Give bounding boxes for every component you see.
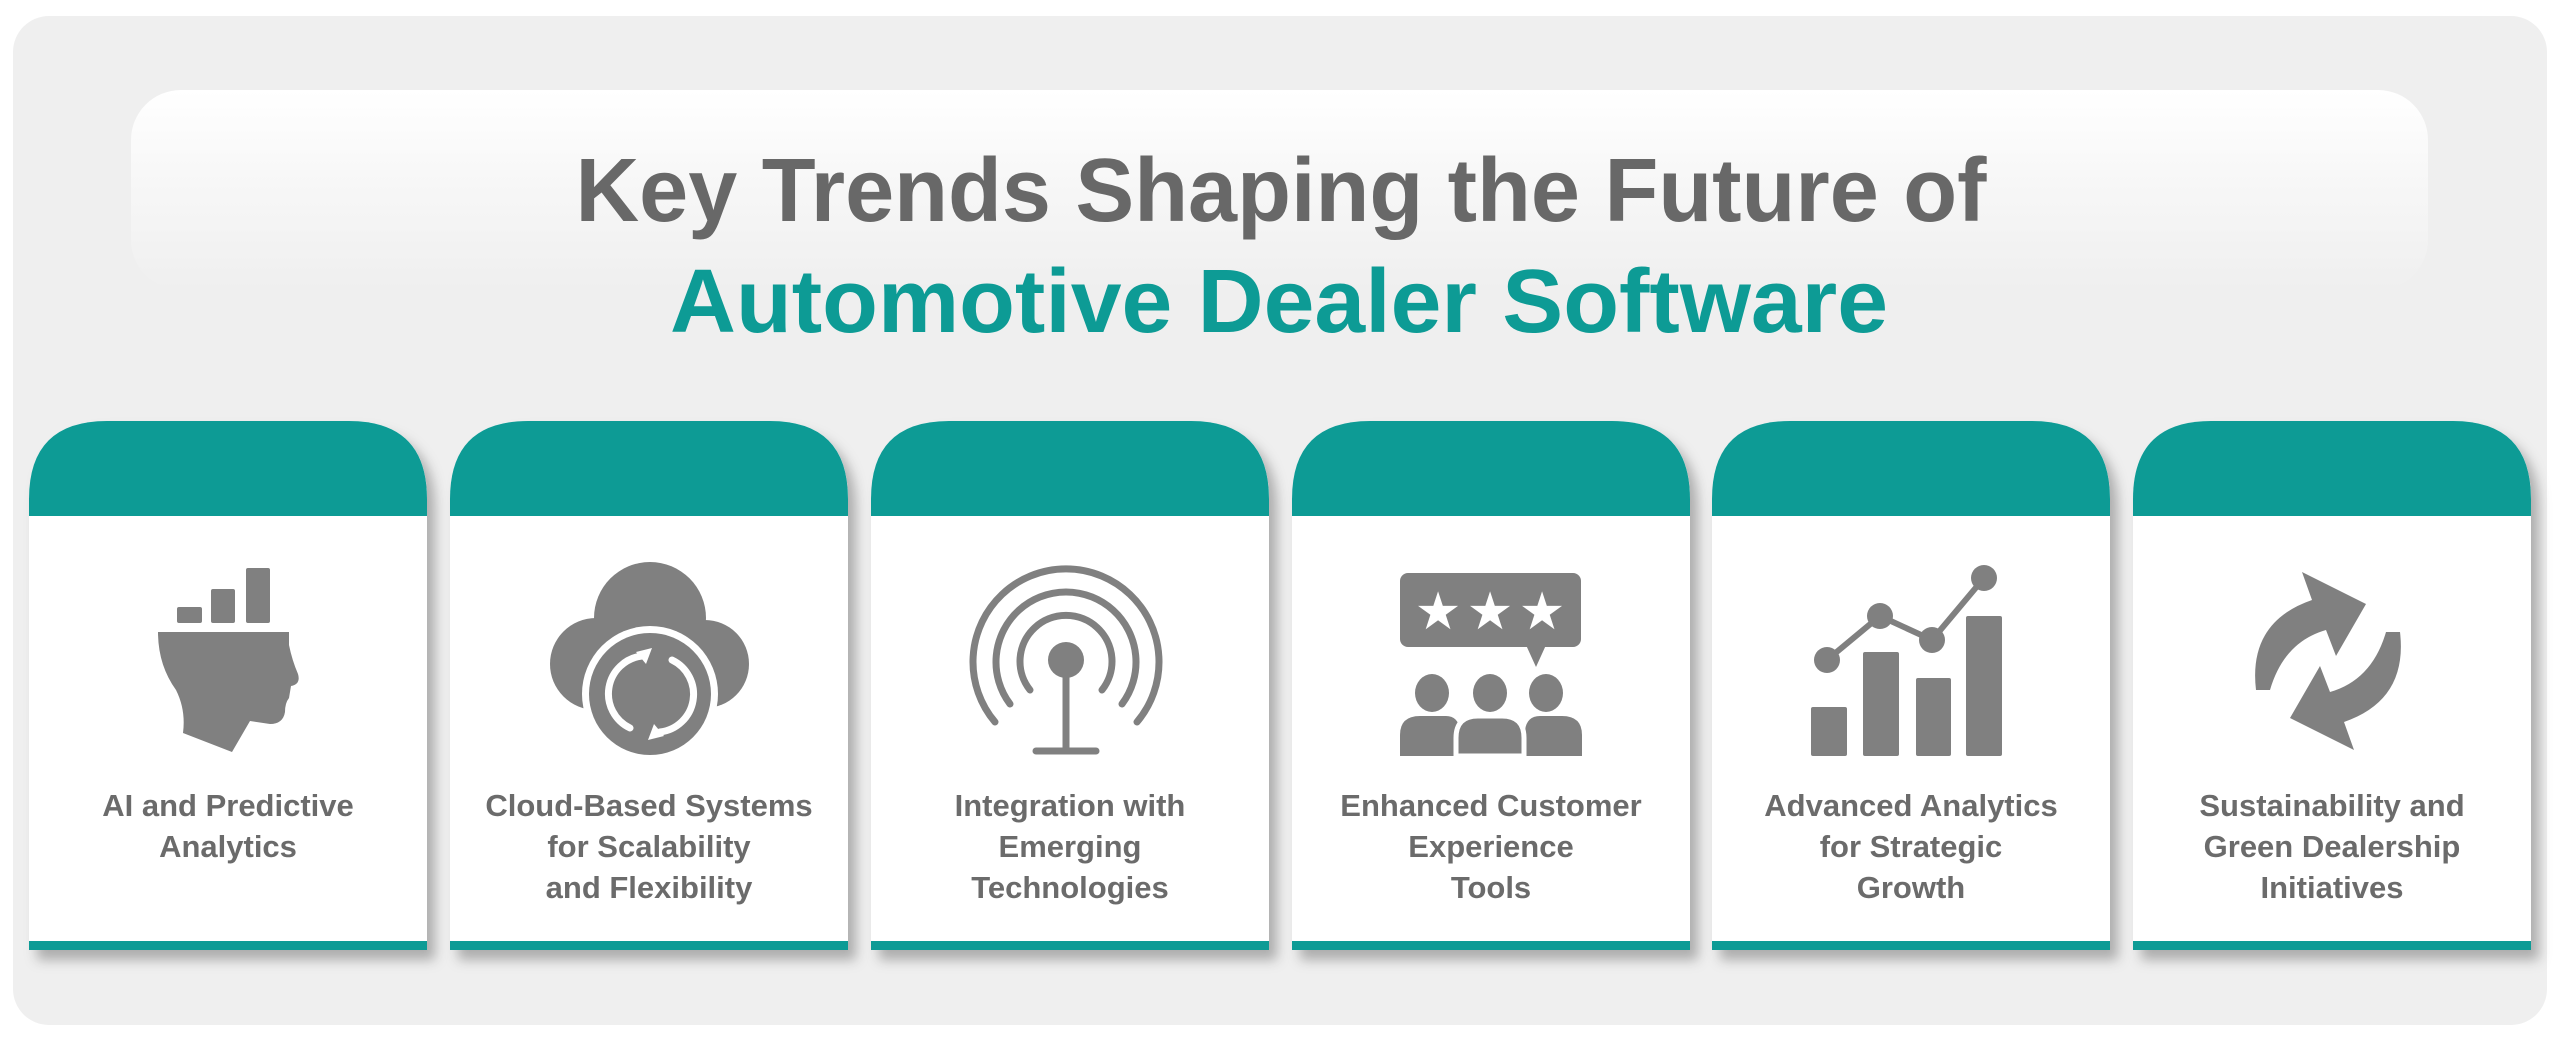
card labels: for Strategic <box>1820 829 2002 864</box>
card 4 <box>1292 421 1690 950</box>
card labels: Cloud-Based Systems <box>485 788 813 823</box>
card labels: Tools <box>1451 870 1531 905</box>
card labels: Experience <box>1408 829 1574 864</box>
icon: analytics chart <box>1811 565 2002 756</box>
card labels: AI and Predictive <box>102 788 354 823</box>
card labels: for Scalability <box>547 829 751 864</box>
title: Key Trends Shaping the Future of <box>576 141 1987 241</box>
icon: customer reviews: ★ <box>1467 582 1513 642</box>
card labels: Technologies <box>971 870 1169 905</box>
card labels: Enhanced Customer <box>1340 788 1642 823</box>
icon: customer reviews: ★ <box>1519 582 1565 642</box>
title: Automotive Dealer Software <box>670 252 1888 352</box>
icon: customer reviews <box>1400 573 1582 756</box>
card labels <box>102 788 2465 905</box>
card labels: Advanced Analytics <box>1764 788 2058 823</box>
icon: head with bars <box>158 568 299 752</box>
card 6 <box>2133 421 2531 950</box>
cards <box>29 421 2531 950</box>
card labels: Growth <box>1857 870 1965 905</box>
title <box>576 141 1987 352</box>
card 3 <box>871 421 1269 950</box>
icon: antenna <box>973 569 1159 751</box>
icon: cloud sync <box>550 562 749 762</box>
card labels: Analytics <box>159 829 297 864</box>
card labels: Initiatives <box>2260 870 2404 905</box>
icon: recycle arrows <box>2255 572 2401 750</box>
card labels: Green Dealership <box>2204 829 2460 864</box>
card 2 <box>450 421 848 950</box>
card labels: Integration with <box>955 788 1185 823</box>
title banner <box>131 90 2428 290</box>
card labels: Emerging <box>999 829 1141 864</box>
card 1 <box>29 421 427 950</box>
icon: customer reviews: ★ <box>1415 582 1461 642</box>
card labels: and Flexibility <box>546 870 753 905</box>
card 5 <box>1712 421 2110 950</box>
card labels: Sustainability and <box>2199 788 2465 823</box>
